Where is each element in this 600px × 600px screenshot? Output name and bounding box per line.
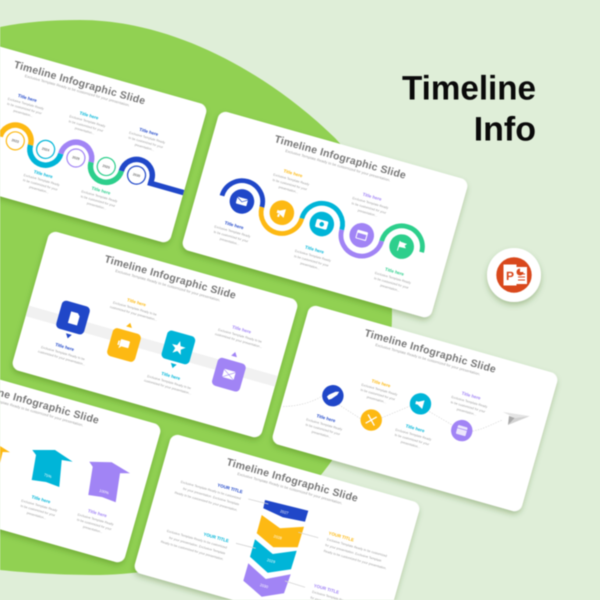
slide 1 text blocks: to be customized for your bbox=[7, 102, 43, 116]
slide 3 title: Timeline Infographic Slide bbox=[103, 253, 237, 302]
slide 6 card and text: YOUR TITLE bbox=[328, 531, 355, 542]
slide 1 text blocks: Exclusive Template Ready bbox=[129, 131, 166, 145]
slide 3 text blocks: Title here bbox=[161, 371, 181, 381]
slide 2 text blocks: Title here bbox=[224, 220, 245, 230]
slide 3 text blocks: customized for your presentation... bbox=[214, 332, 263, 349]
wave track bbox=[0, 114, 189, 204]
slide 1 text blocks: Exclusive Template Ready bbox=[7, 97, 45, 111]
slide 6 card and text: YOUR TITLE bbox=[313, 583, 340, 595]
slide 6 card and text: for your presentation. Exclusive Template bbox=[182, 487, 240, 506]
slide 2 text blocks: Exclusive Template Ready bbox=[273, 173, 310, 187]
panel: slide 6 chevron timeline bbox=[133, 433, 421, 600]
slide 4 text blocks: presentation... bbox=[366, 395, 387, 404]
slide 1 text blocks: to be customized for your bbox=[80, 194, 117, 208]
slide 5 card and text: Exclusive Template Ready bbox=[21, 499, 58, 513]
slide 1 text blocks: Exclusive Template Ready bbox=[81, 189, 118, 203]
arrow labels: 75% bbox=[43, 473, 52, 479]
slide 3 text blocks: Exclusive Template Ready to be bbox=[218, 328, 262, 344]
slide 3 text blocks: customized for your presentation... bbox=[144, 378, 192, 396]
slide 1 text blocks: Title here bbox=[17, 93, 38, 103]
slide 2 text blocks: to be customized for your bbox=[272, 178, 308, 192]
slide 3 text blocks: Exclusive Template Ready to be bbox=[41, 345, 85, 361]
slide 1 text blocks: presentation... bbox=[29, 185, 49, 194]
slide 6 card and text: Ready to be customized for your presentation. bbox=[323, 549, 387, 570]
icon: star bbox=[160, 329, 196, 365]
slide 1 text blocks: to be customized for your bbox=[68, 119, 105, 133]
slide 6 card and text: Exclusive Template Ready to be customized for your presentation. bbox=[237, 472, 343, 505]
year labels: 2029 bbox=[72, 155, 80, 161]
icon: megaphone bbox=[267, 198, 297, 228]
chevron labels: 2030 bbox=[259, 583, 269, 589]
slide 1 text blocks: Exclusive Template Ready bbox=[23, 173, 61, 187]
slide 1 text blocks bbox=[0, 90, 168, 221]
slide 6 card and text: for your presentation. Exclusive Template bbox=[325, 543, 382, 563]
slide 1 text blocks: Title here bbox=[79, 110, 100, 121]
arrow labels bbox=[43, 473, 110, 495]
icon: envelope bbox=[227, 186, 257, 217]
slide 6 card and text: Exclusive Template Ready to be customized bbox=[166, 529, 228, 550]
slide 5 card and text: to be customized for your bbox=[76, 518, 113, 531]
panel: slide 4 paper plane timeline bbox=[271, 304, 559, 513]
slide 4 text blocks: Exclusive Template Ready bbox=[306, 417, 343, 432]
slide 4 text blocks: Exclusive Template Ready bbox=[451, 395, 488, 409]
slide 2 text blocks: presentation... bbox=[300, 261, 320, 271]
slide 2 text blocks: presentation... bbox=[357, 208, 378, 218]
chevron: 2028 bbox=[257, 515, 304, 547]
slide 2 text blocks: Exclusive Template Ready bbox=[352, 196, 389, 210]
slide 6 card and text: Exclusive Template Ready to be customized bbox=[180, 480, 241, 501]
slide 2 text blocks: Title here bbox=[385, 267, 405, 277]
icon: mail bbox=[211, 357, 247, 393]
slide 6 card and text: YOUR TITLE bbox=[203, 532, 229, 543]
slide 6 card and text: Ready to be customized for your presentation. bbox=[174, 491, 238, 512]
slide 1 text blocks: presentation... bbox=[86, 201, 107, 211]
slide 1 text blocks: Title here bbox=[33, 169, 54, 179]
slide 3 text blocks: customized for your presentation... bbox=[38, 349, 86, 367]
year labels: 2025 bbox=[102, 164, 110, 170]
slide 4 title: Timeline Infographic Slide bbox=[363, 327, 497, 376]
year markers bbox=[4, 130, 148, 186]
slide 4 text blocks: Title here bbox=[461, 391, 482, 401]
connector lines bbox=[236, 499, 318, 587]
icon: PowerPoint badge bbox=[487, 248, 541, 302]
chevron: 2027 bbox=[263, 500, 308, 522]
arrow: purple 100% bbox=[88, 462, 130, 502]
slide 2 text blocks: to be customized for your bbox=[213, 230, 250, 244]
slide 1 text blocks: Title here bbox=[139, 127, 159, 137]
slide 3 text blocks: Title here bbox=[232, 324, 252, 335]
slide 4 text blocks: presentation... bbox=[311, 430, 332, 439]
green circle backdrop bbox=[0, 20, 392, 575]
slide 1 text blocks: presentation... bbox=[74, 126, 95, 136]
icon: megaphone bbox=[407, 391, 434, 417]
slide 2 title: Timeline Infographic Slide bbox=[273, 133, 407, 182]
panel: slide 1 numbered wave timeline bbox=[0, 35, 208, 244]
dashed flight path bbox=[283, 361, 503, 465]
slide 5 card and text: Title here bbox=[87, 508, 108, 518]
slide 2 text blocks: presentation... bbox=[278, 185, 299, 194]
slide 1 text blocks: presentation... bbox=[13, 109, 33, 118]
slide 2 text blocks: presentation... bbox=[380, 283, 400, 293]
icon: rocket bbox=[320, 382, 346, 409]
slide 2 text blocks: Title here bbox=[362, 192, 383, 202]
icon: document bbox=[55, 300, 91, 335]
chevron labels: 2028 bbox=[273, 534, 282, 541]
chevron: 2030 bbox=[243, 563, 291, 597]
slide 4 text blocks: Exclusive Template Ready bbox=[361, 383, 398, 397]
slide 4 text blocks: Title here bbox=[405, 423, 426, 434]
icon: chat bbox=[106, 327, 142, 363]
slide 3 text blocks: Exclusive Template Ready to be bbox=[147, 374, 192, 390]
slide 5 card and text: presentation... bbox=[83, 525, 103, 534]
pointers bbox=[65, 306, 238, 384]
arrow: yellow bbox=[0, 446, 10, 463]
slide 2 text blocks: Exclusive Template Ready bbox=[294, 249, 332, 263]
slide 6 card and text: Ready to be customized for your presentation. bbox=[160, 540, 224, 561]
slide 4 text blocks: Title here bbox=[316, 413, 337, 423]
heading bbox=[402, 70, 536, 148]
slide 4 text blocks: Exclusive Template Ready bbox=[395, 428, 432, 442]
slide 6 card and text: Exclusive Template Ready to be customized bbox=[326, 537, 388, 558]
slide 5 card and text: presentation... bbox=[26, 511, 47, 520]
icon: calendar bbox=[449, 417, 475, 444]
slide 4 text blocks bbox=[303, 352, 490, 478]
panel: slide 5 arrow progress bbox=[0, 355, 162, 564]
slide 1 subtitle: Exclusive Template Ready to be customized for your presentation. bbox=[24, 74, 130, 108]
arrow labels: 100% bbox=[99, 489, 110, 495]
slide 1 text blocks: presentation... bbox=[134, 143, 155, 152]
slide 2 text blocks: Exclusive Template Ready bbox=[374, 271, 412, 285]
slide 2 subtitle: Exclusive Template Ready to be customized for your presentation. bbox=[285, 149, 391, 182]
icon: camera bbox=[307, 209, 337, 239]
icon: paper plane bbox=[500, 409, 530, 430]
slide 1 title: Timeline Infographic Slide bbox=[12, 59, 147, 107]
slide 4 text blocks: presentation... bbox=[456, 407, 477, 417]
panel: slide 3 square icon timeline bbox=[11, 230, 299, 439]
slide 4 text blocks: to be customized for your bbox=[360, 388, 397, 402]
slide 2 text blocks: Title here bbox=[305, 244, 325, 255]
icon: flag bbox=[386, 231, 417, 262]
slide 3 subtitle: Exclusive Template Ready to be customized for your presentation. bbox=[115, 269, 221, 302]
slide 2 text blocks: Title here bbox=[283, 168, 304, 178]
icon: calendar bbox=[347, 220, 377, 251]
slide 5 card and text: to be customized for your bbox=[20, 504, 57, 518]
year labels bbox=[11, 138, 141, 178]
chevron labels bbox=[259, 509, 289, 589]
slide 4 text blocks: presentation... bbox=[400, 440, 421, 449]
slide 2 text blocks: to be customized for your bbox=[374, 276, 410, 290]
slide 2 text blocks: to be customized for your bbox=[351, 201, 388, 215]
slide 2 text blocks: presentation... bbox=[219, 237, 240, 246]
slide 1 text blocks: to be customized for your bbox=[23, 178, 59, 192]
arrow: cyan 75% bbox=[32, 450, 73, 487]
slide 5 card and text bbox=[0, 355, 162, 564]
slide 6 card and text: for your presentation. Exclusive Template bbox=[169, 536, 226, 556]
slide 2 text blocks bbox=[211, 154, 432, 296]
chevron: 2029 bbox=[250, 539, 297, 573]
slide 1 text blocks: Title here bbox=[91, 185, 112, 196]
slide 4 subtitle: Exclusive Template Ready to be customized for your presentation. bbox=[375, 343, 481, 376]
chevron labels: 2027 bbox=[280, 509, 289, 516]
slide 1 text blocks: to be customized for your bbox=[128, 136, 164, 149]
slide 4 text blocks: Title here bbox=[371, 378, 392, 389]
heading: Info bbox=[474, 110, 536, 148]
icon: PowerPoint badge: P bbox=[506, 269, 514, 283]
slide 6 card and text: Timeline Infographic Slide bbox=[225, 456, 359, 505]
slide 3 text blocks: Title here bbox=[55, 342, 75, 352]
slide 6 card and text bbox=[133, 433, 421, 600]
slide 5 card and text: Title here bbox=[31, 494, 52, 505]
icon: tools bbox=[358, 407, 384, 433]
slide 3 text blocks bbox=[38, 275, 266, 412]
slide 4 text blocks: to be customized for your bbox=[450, 400, 487, 414]
year labels: 2024 bbox=[41, 147, 50, 153]
year labels: 2023 bbox=[11, 138, 20, 144]
slide 3 text blocks: Exclusive Template Ready to be bbox=[112, 300, 157, 317]
wave track bbox=[216, 176, 427, 272]
slide 2 text blocks: to be customized for your bbox=[294, 254, 330, 268]
slide 2 text blocks: Exclusive Template Ready bbox=[214, 224, 251, 239]
chevron labels: 2029 bbox=[266, 558, 276, 564]
slide 3 text blocks: Title here bbox=[127, 297, 147, 308]
slide 3 text blocks: customized for your presentation... bbox=[109, 305, 158, 322]
slide 1 text blocks: Exclusive Template Ready bbox=[69, 114, 106, 128]
grey band bbox=[26, 306, 278, 387]
heading: Timeline bbox=[402, 70, 536, 108]
slide 4 text blocks: to be customized for your bbox=[305, 423, 341, 436]
year labels: 2030 bbox=[132, 172, 141, 178]
panel: slide 2 icon wave timeline bbox=[181, 110, 469, 319]
slide 4 text blocks: to be customized for your bbox=[394, 433, 431, 447]
slide 6 card and text: YOUR TITLE bbox=[217, 482, 243, 494]
slide 5 card and text: Exclusive Template Ready bbox=[77, 512, 115, 527]
